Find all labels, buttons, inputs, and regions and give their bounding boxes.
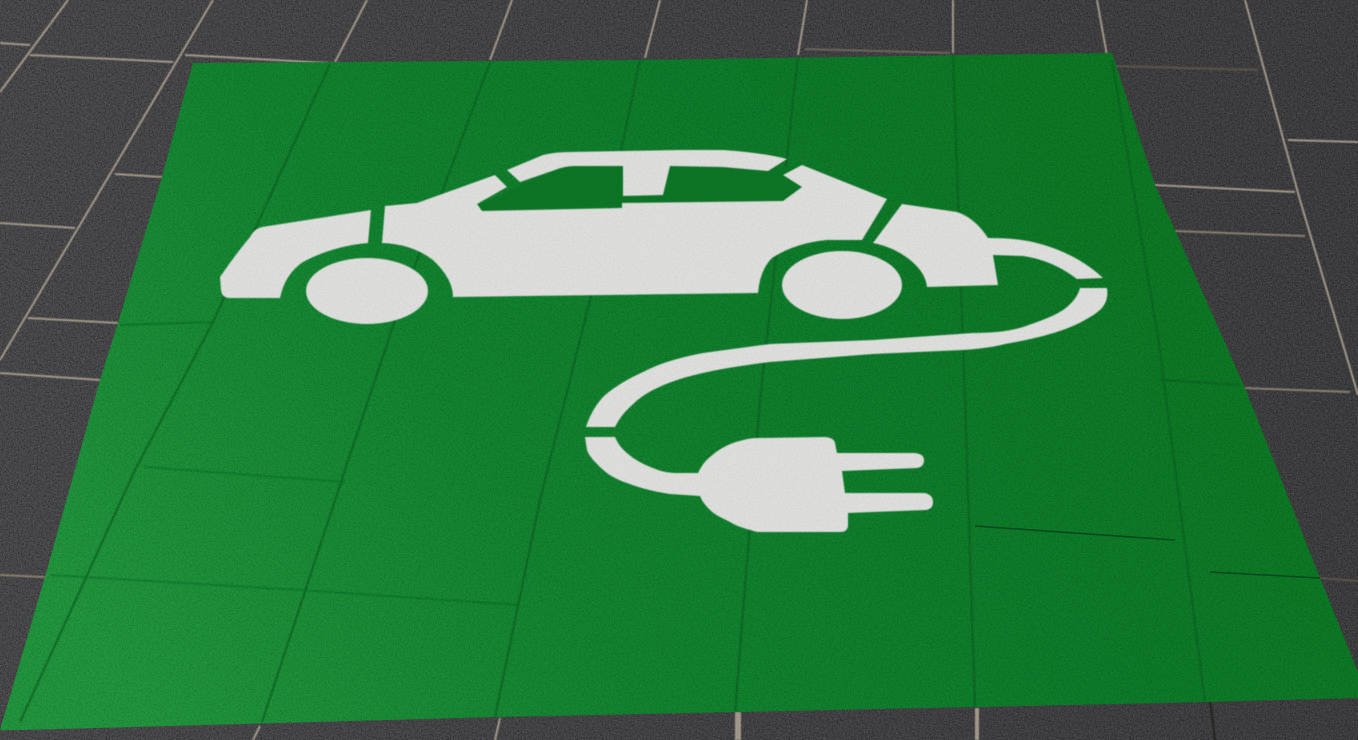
icon: charging cable upper curve <box>586 288 1107 427</box>
left wheel <box>306 258 428 324</box>
bay cracks <box>975 526 1320 578</box>
car roof and pillar <box>507 150 787 196</box>
car front panel and cable root <box>873 204 1103 287</box>
car window shading <box>477 167 802 211</box>
car centre body <box>382 165 887 297</box>
right wheel <box>782 251 902 319</box>
icon: plug with lower cable <box>585 437 933 532</box>
icon: electric car <box>220 150 1103 324</box>
car rear panel <box>220 210 371 298</box>
